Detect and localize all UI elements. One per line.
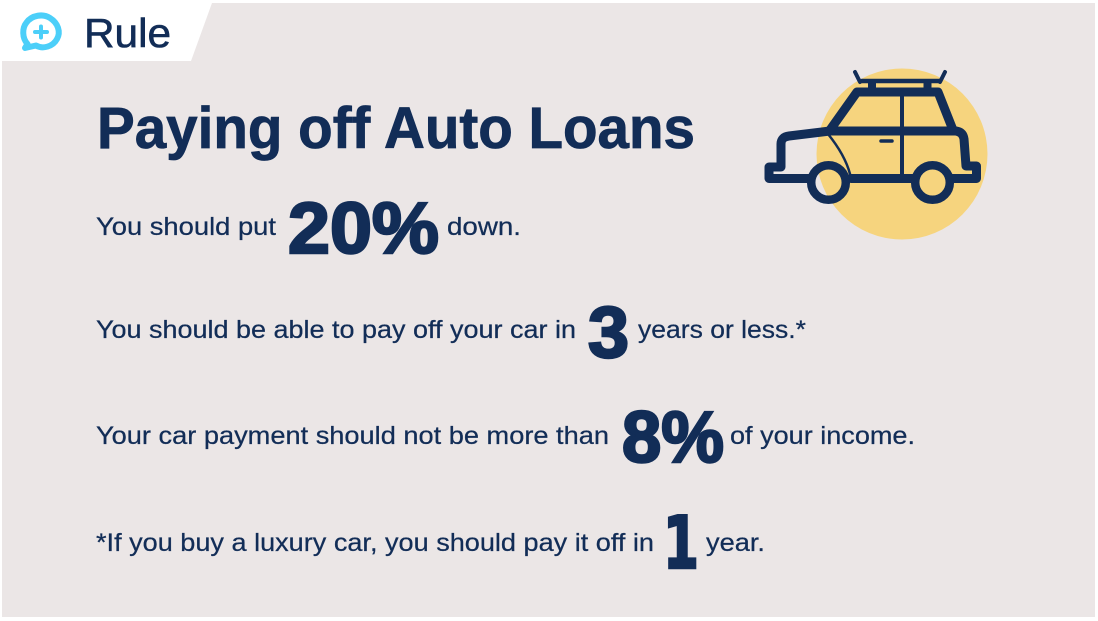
rule: 3 years: 3 (588, 293, 629, 373)
icon: car on yellow circle (769, 68, 988, 240)
rule: 8% of income: Your car payment should not be more than (96, 422, 609, 450)
tab shape (0, 3, 212, 61)
rule: 8% of income (96, 398, 915, 478)
rule: 3 years: You should be able to pay off your car in (96, 316, 576, 344)
rule: 8% of income: of your income. (730, 422, 915, 450)
footnote: luxury car 1 year: *If you buy a luxury car, you should pay it off in (96, 529, 654, 557)
brand name: Rule (84, 10, 171, 56)
rule: 3 years: years or less.* (638, 316, 806, 344)
icon: speech bubble with plus (23, 15, 59, 48)
footnote: luxury car 1 year (96, 501, 765, 585)
rule: 20% down (96, 189, 521, 269)
rule: 20% down: down. (447, 213, 521, 241)
footnote: luxury car 1 year: 1 (663, 501, 699, 585)
rule: 3 years (96, 293, 806, 373)
rule: 20% down: 20% (288, 189, 439, 269)
title: Paying off Auto Loans (97, 96, 695, 161)
logo tab (0, 3, 212, 61)
rule: 8% of income: 8% (622, 398, 724, 478)
rule: 20% down: You should put (96, 213, 276, 241)
footnote: luxury car 1 year: year. (706, 529, 765, 557)
